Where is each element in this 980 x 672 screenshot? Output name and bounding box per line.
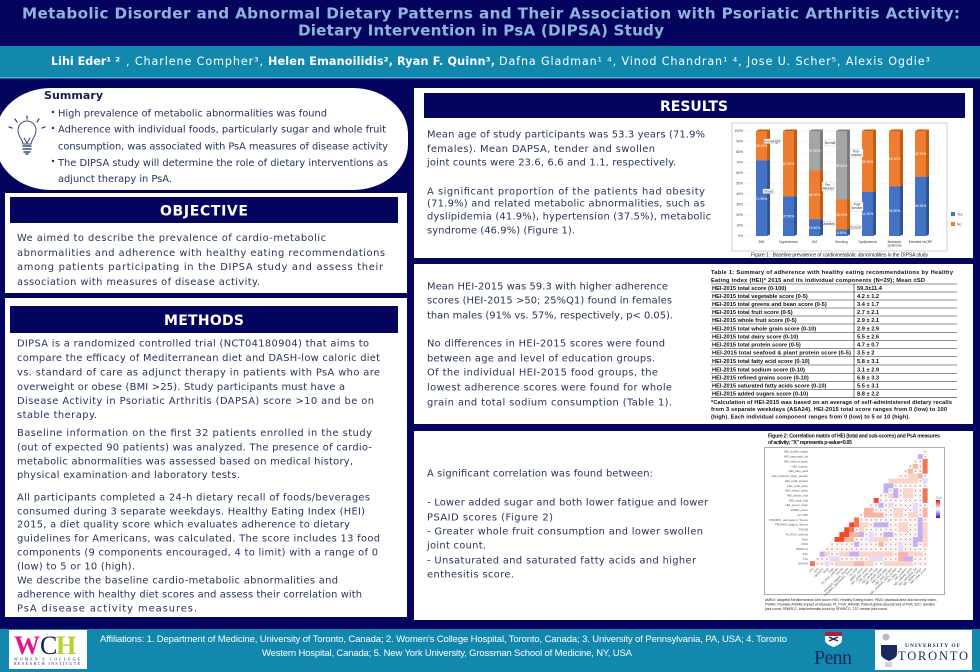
- bar: metabolic syndrome: 46.90%: [889, 209, 900, 213]
- heatmap column labels: HEI_refined_grain: [893, 567, 913, 587]
- heatmap row labels: PROMIS_depression_Tscore: [769, 518, 808, 522]
- methods text: We describe the baseline cardio-metabolic abnormalities and: [17, 576, 338, 586]
- bar: hypertension: 62.50%: [783, 162, 794, 166]
- heatmap row labels: Pt_PGA_arthritis: [786, 532, 808, 536]
- HEI text: between age and level of education groups.: [427, 354, 655, 364]
- panel: HEI results: [414, 264, 973, 424]
- methods text: DIPSA is a randomized controlled trial (NCT04180904) that aims to: [17, 338, 369, 350]
- y axis labels: 60%: [736, 171, 743, 175]
- authors band: Dafna Gladman¹ ⁴, Vinod Chandran¹ ⁴, Jose U. Scher⁵, Alexis Ogdie³: [499, 55, 930, 68]
- x axis labels: Smoking: [835, 240, 848, 244]
- methods text: adherence with healthy diet scores and assess their correlation with: [17, 590, 362, 600]
- table 1: 5.5 ± 3.1: [857, 384, 879, 390]
- table 1: Eating Index (HEI)* 2015 and its individual components (N=29); Mean ±SD: [711, 278, 925, 284]
- methods text: components (9 components encouraged, 4 to limit) with a range of 0: [17, 548, 378, 558]
- x axis labels: Hypertension: [779, 240, 798, 244]
- heading: methods: [10, 306, 398, 333]
- table 1: HEI-2015 added sugars score (0-10): [712, 392, 808, 398]
- y axis labels: 100%: [734, 129, 743, 133]
- table 1: HEI-2015 saturated fatty acids score (0-10): [712, 384, 827, 390]
- logo: WCH: [9, 630, 87, 669]
- bar chart: figure 1: Overweight: [764, 140, 780, 144]
- correlation text: - Unsaturated and saturated fatty acids and higher: [427, 556, 697, 566]
- methods text: stable therapy.: [17, 410, 97, 421]
- bar: elevated hsCRP: [915, 130, 929, 236]
- table 1: HEI-2015 total whole grain score (0-10): [712, 326, 816, 332]
- HEI text: than males (91% vs. 57%, respectively, p< 0.05).: [427, 310, 673, 322]
- panel: summary: [0, 88, 408, 190]
- heatmap column labels: PROMIS_fatigue_Tscore: [823, 567, 849, 593]
- bar: smoking: 65.60%: [836, 164, 847, 168]
- bar: diabetes status: 46.90%: [809, 193, 820, 197]
- table 1: 59.3±11.4: [857, 286, 883, 292]
- heatmap row labels: SPARCC: [796, 547, 809, 551]
- heatmap column labels: HEI_added_sugar: [902, 567, 922, 587]
- authors band: Lihi Eder¹ ²: [51, 55, 120, 68]
- correlation text: PSAID scores (Figure 2): [427, 512, 553, 524]
- bar: diabetes status: 37.50%: [809, 149, 820, 153]
- logo: WCH: RESEARCH INSTITUTE: [14, 661, 81, 666]
- heatmap column labels: PROMIS_depression_Tscore: [824, 567, 854, 597]
- heatmap row labels: HEI_seafood_plant_protein: [772, 474, 808, 478]
- methods text: [17, 338, 380, 614]
- objective text: We aimed to describe the prevalence of cardio-metabolic: [17, 233, 326, 244]
- panel: objective: [5, 193, 407, 293]
- authors band: Helen Emanoilidis²,: [268, 55, 393, 68]
- x axis labels: [759, 240, 932, 248]
- table 1: 2.9 ± 2.9: [857, 326, 879, 332]
- table 1: 4.7 ± 0.7: [857, 342, 879, 348]
- heatmap colour legend: Corr: [936, 496, 942, 500]
- methods text: Baseline information on the first 32 patients enrolled in the study: [17, 428, 372, 439]
- heatmap column labels: HEI_whole_grain: [864, 567, 883, 586]
- results text: (71.9%) and related metabolic abnormalities, such as: [427, 198, 705, 210]
- bar: dyslipidemia: 58.10%: [862, 160, 873, 164]
- logo: University of Toronto: TORONTO: [898, 649, 968, 663]
- table 1: 6.8 ± 3.3: [857, 376, 879, 382]
- correlation text: enthesitis score.: [427, 570, 514, 580]
- heatmap column labels: HEI_total_fruit: [857, 567, 874, 583]
- heatmap row labels: HEI_total_fruit: [789, 498, 808, 502]
- callouts: [763, 139, 863, 230]
- heatmap row labels: PASI: [801, 542, 808, 546]
- bar: BMI: 28.10%: [756, 144, 767, 148]
- heatmap row labels: HEI_total_dairy: [787, 484, 808, 488]
- bar: smoking: 6.30%: [837, 231, 846, 235]
- logo: WCH: C: [40, 631, 57, 660]
- heatmap column labels: PASI: [822, 567, 830, 574]
- table 1: HEI-2015 total dairy score (0-10): [712, 334, 798, 340]
- table footnote: *Calculation of HEI-2015 was based on an average of self-administered dietary recalls: [711, 400, 952, 406]
- heatmap column labels: HEI_total_dairy: [871, 567, 889, 584]
- methods text: All participants completed a 24-h dietary recall of foods/beverages: [17, 492, 370, 504]
- table 1: HEI-2015 total fatty acid score (0-10): [712, 359, 810, 365]
- title: [22, 4, 960, 40]
- bar chart: figure 1: Current: [850, 226, 861, 230]
- panel: methods: [5, 298, 407, 617]
- results text: Mean age of study participants was 53.3 years (71.9%: [427, 130, 705, 140]
- bar chart: figure 1: smoker: [852, 206, 863, 210]
- logo: WCH: H: [56, 631, 76, 660]
- heatmap row labels: SJC: [802, 552, 809, 556]
- heading: objective: OBJECTIVE: [160, 204, 248, 220]
- HEI text: Of the individual HEI-2015 food groups, the: [427, 368, 658, 378]
- HEI text: No differences in HEI-2015 scores were found: [427, 338, 665, 350]
- bar chart: figure 1: Non-: [853, 150, 860, 154]
- gridlines: [745, 131, 940, 236]
- summary bullets: [52, 108, 388, 185]
- y axis labels: 0%: [738, 234, 743, 238]
- heatmap row labels: PROMIS_fatigue_Tscore: [775, 523, 808, 527]
- heatmap column labels: [808, 566, 927, 597]
- table 1: HEI-2015 total sodium score (0-10): [712, 368, 805, 374]
- authors band: [0, 46, 980, 78]
- heatmap column labels: HEI_total_protein: [874, 567, 893, 586]
- footer band: [0, 629, 980, 672]
- panel: correlation: [414, 431, 973, 620]
- table 1: 3.4 ± 1.7: [857, 302, 879, 308]
- table 1: 8.8 ± 2.2: [857, 392, 879, 398]
- bar: elevated hsCRP: 43.70%: [915, 152, 926, 156]
- heatmap column labels: HEI_sodium: [893, 567, 908, 581]
- bar chart: figure 1: Pre-: [825, 183, 831, 187]
- x axis labels: Dyslipidemia: [858, 240, 877, 244]
- affiliations: Affiliations: 1. Department of Medicine, University of Toronto, Canada; 2. Women's College Hospital, Toronto, Canada; 3. University of Pennsylvania, PA, USA; 4. Toronto: [100, 634, 787, 645]
- summary bullets: consumption, was associated with PsA measures of disease activity: [58, 142, 388, 152]
- bar: BMI: [756, 130, 770, 236]
- bar: smoking: [836, 130, 850, 236]
- HEI text: scores (HEI-2015 >50; 25%Q1) found in females: [427, 296, 672, 306]
- heatmap row labels: HEI_whole_grain: [785, 489, 808, 493]
- y axis labels: 20%: [736, 213, 743, 217]
- figure 2 footnote: joint count; SPARCC: total enthesitis count by SPARCC; TJC: tender joint count: [764, 607, 888, 611]
- authors band: , Charlene Compher³,: [126, 55, 263, 68]
- y axis labels: 30%: [736, 202, 743, 206]
- table 1: [711, 270, 957, 420]
- x axis labels: syndrome: [888, 244, 902, 248]
- table footnote: from 3 separate weekdays (ASA24). HEI-2015 total score ranges from 0 (low) to 100: [711, 407, 947, 413]
- heatmap column labels: hs-CRP: [848, 567, 859, 577]
- table footnote: [711, 400, 952, 420]
- results text: joint counts were 23.6, 6.6 and 1.1, respectively.: [426, 158, 676, 168]
- authors band: Ryan F. Quinn³,: [397, 55, 495, 68]
- x axis labels: DM: [812, 240, 817, 244]
- x axis labels: Elevated hsCRP: [909, 240, 932, 244]
- table 1: HEI-2015 total greens and bean score (0-5): [712, 302, 827, 308]
- heatmap column labels: HEI_seafood_plant_protein: [869, 567, 898, 595]
- bar chart: figure 1: [732, 123, 963, 258]
- logo: University of Toronto: [875, 630, 972, 670]
- correlation text: - Lower added sugar and both lower fatigue and lower: [427, 498, 709, 508]
- objective text: [17, 233, 385, 288]
- bar: metabolic syndrome: 53.10%: [889, 157, 900, 161]
- heatmap row labels: hs-CRP: [797, 513, 808, 517]
- table 1: HEI-2015 total vegetable score (0-5): [712, 294, 808, 300]
- heatmap row labels: HEI_fatty_acid: [788, 469, 808, 473]
- figure 2: correlation matrix: [764, 434, 944, 611]
- results text: dyslipidemia (41.9%), hypertension (37.5%), metabolic: [427, 212, 711, 222]
- methods text: Disease Activity in Psoriatic Arthritis (DAPSA) score >10 and be on: [17, 396, 374, 407]
- heading: results: [424, 93, 965, 118]
- icon: light bulb: [9, 116, 45, 154]
- summary bullets: The DIPSA study will determine the role of dietary interventions as: [57, 158, 388, 169]
- methods text: vs. standard of care as adjunct therapy in patients with PsA who are: [17, 368, 380, 378]
- y axis labels: 80%: [736, 150, 743, 154]
- y axis labels: 70%: [736, 160, 743, 164]
- bar: dyslipidemia: [862, 130, 876, 236]
- heatmap column labels: Pain: [828, 567, 835, 574]
- x axis labels: BMI: [759, 240, 764, 244]
- logo: WCH: WOMEN'S COLLEGE: [14, 656, 81, 662]
- methods text: 2015, a diet quality score which evaluates adherence to dietary: [17, 520, 350, 530]
- table 1: 3.5 ± 2: [857, 350, 874, 356]
- heatmap column labels: HEI_saturated_fat: [898, 567, 918, 587]
- table 1: HEI-2015 total score (0-100): [712, 286, 786, 292]
- heatmap row labels: TJC: [802, 557, 809, 561]
- objective text: abnormalities and adherence with healthy eating recommendations: [17, 248, 385, 259]
- heatmap row labels: DAPSA: [798, 562, 808, 566]
- heatmap column labels: aMED_score: [849, 567, 864, 582]
- heatmap row labels: HEI_added_sugar: [784, 450, 808, 454]
- table 1: HEI-2015 refined grains score (0-10): [712, 376, 809, 382]
- logo: Penn: Penn: [814, 647, 852, 669]
- HEI text: lowest adherence scores were found for whole: [427, 382, 672, 394]
- heading: summary: Summary: [44, 89, 103, 102]
- heatmap row labels: HEI_whole_fruit: [787, 494, 808, 498]
- heatmap colour legend: [936, 496, 942, 518]
- correlation text: - Greater whole fruit consumption and lower swollen: [427, 526, 703, 538]
- objective text: among patients participating in the DIPSA study and assess their: [17, 262, 384, 273]
- methods text: (low) to 5 or 10 (high).: [17, 562, 135, 572]
- logo: Penn: [814, 632, 852, 669]
- bar chart: figure 1: diabetes: [822, 186, 834, 190]
- table 1: HEI-2015 total fruit score (0-5): [712, 310, 793, 316]
- results text: syndrome (46.9%) (Figure 1).: [427, 226, 575, 236]
- table 1: 4.2 ± 1.2: [857, 294, 879, 300]
- y axis labels: 10%: [736, 224, 743, 228]
- objective text: association with measures of disease activity.: [17, 277, 260, 288]
- heatmap row labels: HEI_total_protein: [785, 479, 808, 483]
- bar: BMI: 71.90%: [756, 197, 767, 201]
- legend: [951, 212, 963, 226]
- heatmap column labels: SPARCC: [813, 566, 825, 578]
- x axis labels: Metabolic: [888, 240, 902, 244]
- affiliations: Western Hospital, Canada; 5. New York University, Grossman School of Medicine, NY, USA: [262, 648, 633, 659]
- figure 2 title: Figure 2: Correlation matrix of HEI (total and sub-scores) and PsA measures: [768, 434, 940, 440]
- affiliations: [100, 634, 787, 659]
- panel: results: [414, 88, 973, 258]
- y axis labels: [734, 129, 743, 238]
- y axis labels: 40%: [736, 192, 743, 196]
- title: Dietary Intervention in PsA (DIPSA) Study: [298, 22, 664, 40]
- table 1: HEI-2015 total protein score (0-5): [712, 342, 801, 348]
- table 1: HEI-2015 whole fruit score (0-5): [712, 318, 797, 324]
- heatmap column labels: HEI_whole_fruit: [861, 567, 879, 585]
- table 1: 2.9 ± 2.1: [857, 318, 879, 324]
- caption: figure 1: Figure 1 : Baseline prevalence of cardiometabolic abnormalities in the DIPSA study: [751, 252, 928, 258]
- results text: [426, 130, 711, 236]
- title: Metabolic Disorder and Abnormal Dietary Patterns and Their Association with Psoriatic Arthritis Activity:: [22, 4, 960, 22]
- methods text: consumed during 3 separate weekdays. Healthy Eating Index (HEI): [17, 506, 365, 518]
- legend: Yes: [957, 212, 963, 216]
- bar: hypertension: 37.50%: [783, 214, 794, 218]
- methods text: PsA disease activity measures.: [17, 604, 197, 614]
- figure 2 footnote: [764, 598, 937, 611]
- heatmap column labels: SJC: [813, 566, 820, 574]
- HEI text: Mean HEI-2015 was 59.3 with higher adherence: [427, 282, 668, 292]
- figure 2 title: [768, 434, 940, 446]
- table 1: 2.7 ± 2.1: [857, 310, 879, 316]
- bar: dyslipidemia: 41.90%: [862, 212, 873, 216]
- bar chart: figure 1: Past: [854, 202, 860, 206]
- methods text: metabolic abnormalities was assessed based on medical history,: [17, 456, 353, 468]
- summary bullets: adjunct therapy in PsA.: [58, 174, 172, 185]
- summary bullets: Adherence with individual foods, particularly sugar and whole fruit: [58, 124, 386, 136]
- bar: hypertension: [783, 130, 797, 236]
- heatmap row labels: PSAID: [799, 528, 809, 532]
- methods text: overweight or obese (BMI >25). Study participants must have a: [17, 382, 345, 393]
- table 1: Table 1: Summary of adherence with healthy eating recommendations by Healthy: [711, 270, 954, 276]
- heatmap column labels: HEI_green_bean: [850, 567, 869, 586]
- heatmap column labels: HEI_fatty_acid: [886, 567, 903, 584]
- heatmap column labels: PSAID: [835, 566, 845, 576]
- heatmap row labels: HEI_refined_grain: [784, 459, 808, 463]
- heatmap row labels: Pain: [802, 537, 808, 541]
- figure 2 title: of activity; "X" represents p-value<0.05: [768, 440, 852, 446]
- HEI text: grain and total sodium consumption (Table 1).: [427, 398, 672, 408]
- logo: University of Toronto: UNIVERSITY OF: [905, 643, 961, 649]
- summary bullets: High prevalence of metabolic abnormalities was found: [58, 108, 327, 120]
- table 1: 5.5 ± 2.6: [857, 334, 879, 340]
- figure 2 footnote: aMED: adapted Mediterranean Diet score; HEI: Healthy Eating Index; PASI: psoriasis area and severity index;: [765, 598, 937, 602]
- bar chart: figure 1: smoker: [851, 153, 863, 157]
- bar chart: figure 1: Diabetes: [822, 222, 835, 226]
- heatmap row labels: HEI_saturated_fat: [784, 454, 808, 458]
- heading: methods: METHODS: [164, 313, 244, 329]
- heatmap column labels: Pt_PGA_arthritis: [821, 567, 840, 586]
- results text: A significant proportion of the patients had obesity: [427, 186, 705, 198]
- logo: WCH: W: [14, 631, 40, 660]
- y axis labels: 50%: [736, 182, 743, 186]
- correlation text: A significant correlation was found between:: [427, 468, 653, 480]
- heading: objective: [10, 197, 398, 223]
- table 1: 5.8 ± 3.1: [857, 359, 879, 365]
- figure 2 footnote: PSAID: Psoriatic Arthritis Impact of Disease; Pt_PGA_Arthritis: Patient global assessment of PsA; SJC: Swollen: [765, 602, 935, 606]
- heatmap column labels: HEI_total_score: [909, 567, 927, 585]
- heatmap row labels: HEI_green_bean: [785, 503, 808, 507]
- bar: diabetes status: [809, 130, 823, 236]
- legend: No: [957, 222, 961, 226]
- bar chart: figure 1: Normal: [825, 141, 835, 145]
- correlation text: [426, 468, 709, 580]
- table 1: HEI-2015 total seafood & plant protein score (0-5): [712, 350, 851, 356]
- table footnote: (high). Each individual component ranges from 0 (low) to 5 or 10 (high).: [711, 414, 910, 420]
- methods text: guidelines for Americans, was calculated. The score includes 13 food: [17, 534, 380, 544]
- heatmap row labels: [769, 450, 809, 566]
- HEI text: [427, 282, 673, 408]
- methods text: (out of expected 90 patients) was analyzed. The presence of cardio-: [17, 442, 372, 454]
- heading: results: RESULTS: [660, 99, 728, 115]
- correlation text: joint count.: [426, 540, 486, 552]
- heatmap row labels: HEI_sodium: [792, 464, 808, 468]
- methods text: compare the efficacy of Mediterranean diet and DASH-low caloric diet: [17, 353, 380, 364]
- heatmap column labels: TJC: [808, 566, 815, 574]
- heatmap row labels: aMED_score: [791, 508, 808, 512]
- table 1: 3.1 ± 2.9: [857, 368, 879, 374]
- heatmap cells: [810, 449, 928, 566]
- y axis labels: 90%: [736, 140, 743, 144]
- bar: diabetes status: 15.60%: [809, 226, 820, 230]
- bar: metabolic syndrome: [889, 130, 903, 236]
- bar: smoking: 28.10%: [836, 213, 847, 217]
- methods text: physical examination and laboratory tests.: [17, 470, 240, 481]
- results text: females). Mean DAPSA, tender and swollen: [427, 144, 655, 155]
- bar chart: figure 1: Obese: [764, 190, 773, 194]
- bar: elevated hsCRP: 56.30%: [915, 204, 926, 208]
